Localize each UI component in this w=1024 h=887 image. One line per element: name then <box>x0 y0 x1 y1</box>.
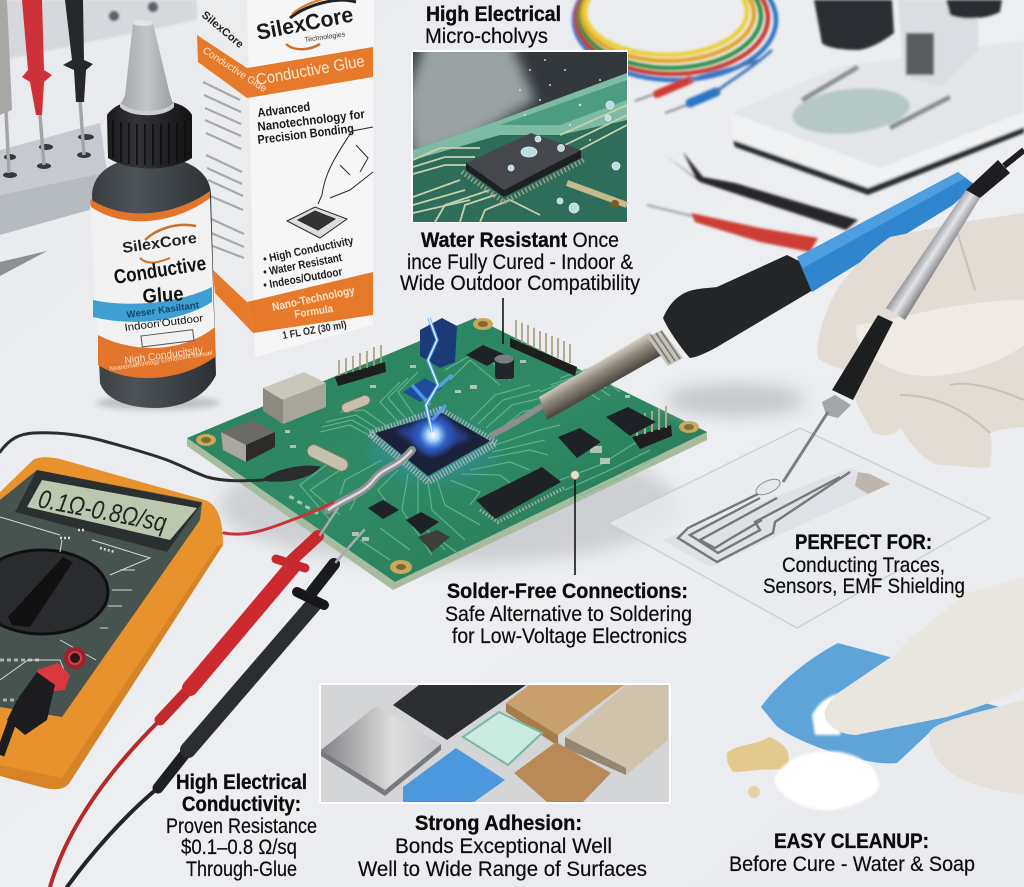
microscope, top right <box>731 0 1024 195</box>
selector dial <box>0 550 108 634</box>
label: strong adhesion: Well to Wide Range of Surfaces <box>358 858 647 881</box>
conductive silver trace <box>678 472 850 562</box>
samples: brushed metal <box>321 706 441 790</box>
label: water resistant: Water Resistant Once <box>421 229 619 252</box>
label: solder-free connections: Safe Alternative to Soldering <box>445 603 692 626</box>
panel: strong adhesion material samples <box>319 683 671 804</box>
label: high electrical micro-cholvys: High Electrical <box>426 3 561 26</box>
soldering iron <box>490 172 975 436</box>
glue bottle: Nigh Conducitsity <box>124 344 204 367</box>
input jack <box>37 647 86 692</box>
blue capacitor component <box>420 318 457 368</box>
cleanup: gloved fingers <box>825 577 1024 795</box>
samples: clear glass <box>463 712 542 765</box>
label: solder-free connections: for Low-Voltage Electronics <box>452 625 687 648</box>
cleanup: blue sponge cloth <box>761 643 1011 763</box>
box logo: SilexCore <box>254 2 355 45</box>
bottle nozzle <box>120 20 174 115</box>
label: easy cleanup <box>729 830 975 876</box>
box bullet list <box>262 235 355 292</box>
glue droplet <box>754 476 782 498</box>
cleanup: glue spill <box>727 737 789 798</box>
glue bottle: Conductive <box>112 253 208 289</box>
main microprocessor <box>370 410 496 482</box>
box side text lines <box>203 82 244 258</box>
gloved hand holding applicator pen <box>783 150 1024 482</box>
glue bottle: Neanomatroretogy Enrhorcent formuel <box>109 350 214 373</box>
label: solder-free connections: Solder-Free Connections: <box>447 580 688 603</box>
box headline <box>257 100 366 147</box>
label: perfect for: Sensors, EMF Shielding <box>763 575 965 598</box>
box headline: Precision Bonding <box>257 121 355 147</box>
label: water resistant: Wide Outdoor Compatibility <box>400 272 640 295</box>
product box: SilexCore Conductive Glue: 1 FL OZ (30 ml) <box>281 319 348 342</box>
glue bottle: Indoori'Outdoor <box>124 312 204 334</box>
LCD reading: 0.1Ω-0.8Ω/sq <box>36 483 170 538</box>
label: solder-free connections <box>445 580 692 648</box>
chips on pcb <box>368 345 656 552</box>
dark inductor block <box>221 420 275 462</box>
product box: SilexCore Conductive Glue: Formula <box>294 303 335 321</box>
pegboard with test probes, top left <box>0 0 197 276</box>
bottle logo and labels: SilexCore <box>121 230 198 257</box>
label: easy cleanup: EASY CLEANUP: <box>774 830 929 853</box>
product box: SilexCore Conductive Glue: Conductive Glue <box>200 45 269 95</box>
label: strong adhesion: Strong Adhesion: <box>415 812 582 835</box>
samples: textured beige <box>565 685 668 775</box>
silver conductive glue line <box>328 450 412 510</box>
applicator pen <box>886 190 980 320</box>
product box: SilexCore Conductive Glue: Conductive Glue <box>255 53 366 89</box>
mounting holes <box>196 318 699 574</box>
label: easy cleanup: Before Cure - Water & Soap <box>729 853 975 876</box>
label: perfect for: Conducting Traces, <box>782 554 945 577</box>
glass substrate with printed trace <box>608 428 990 628</box>
circuit board <box>187 318 707 590</box>
label: high electrical conductivity: Proven Resistance <box>166 815 317 838</box>
label: high electrical conductivity: $0.1–0.8 Ω/sq <box>181 836 297 859</box>
label: high electrical micro-cholvys: Micro-cholvys <box>425 25 548 48</box>
box illustration: hand applying glue on chip <box>287 127 373 238</box>
pcb traces <box>300 350 660 560</box>
label: high electrical micro-cholvys <box>425 3 561 48</box>
product box: SilexCore Conductive Glue <box>197 0 374 357</box>
label: water resistant: ince Fully Cured - Indoor & <box>407 251 633 274</box>
dial scale labels <box>0 517 150 700</box>
box logo: Technologies <box>304 31 346 44</box>
box headline: Nanotechnology for <box>257 107 366 134</box>
black test probe <box>67 530 364 887</box>
water chip <box>466 133 581 190</box>
plugged-in black lead <box>0 672 55 755</box>
product box: SilexCore Conductive Glue: Nano-Technology <box>271 285 356 314</box>
samples: oak <box>514 742 611 802</box>
capacitor <box>494 354 514 379</box>
box headline: Advanced <box>257 100 311 120</box>
box bullet list: • High Conductivity <box>262 235 355 266</box>
box bullet list: • Water Resistant <box>262 252 343 279</box>
samples: black acrylic <box>393 685 526 740</box>
red test probe <box>50 508 338 887</box>
glue bottle: Glue <box>142 283 184 308</box>
crystals <box>305 394 372 473</box>
cleanup: soap foam <box>774 694 879 810</box>
glue bottle: Weser Kasiltant <box>126 300 201 321</box>
multimeter <box>0 457 223 789</box>
pcb component specks <box>285 360 651 549</box>
callout leader: solder-free dot <box>570 470 580 480</box>
dip ic pins <box>480 488 564 522</box>
pin headers <box>335 320 672 449</box>
tweezers and red tool behind the iron <box>647 152 858 252</box>
multimeter cables from board <box>0 433 333 534</box>
bottle cap <box>107 100 192 168</box>
lightning spark <box>409 318 457 459</box>
callout leader lines <box>503 298 575 575</box>
shielding can <box>263 372 326 424</box>
label: perfect for <box>763 531 965 598</box>
label: perfect for: PERFECT FOR: <box>795 531 932 554</box>
label: high electrical conductivity: Conductivity: <box>182 793 301 816</box>
water traces <box>413 105 627 222</box>
label: high electrical conductivity: High Electrical <box>176 771 307 794</box>
box bullet list: • Indeos/Outdoor <box>262 266 344 292</box>
product box: SilexCore Conductive Glue: SilexCore <box>199 9 246 51</box>
water droplets <box>508 101 620 213</box>
label: strong adhesion <box>358 812 647 881</box>
label: water resistant <box>400 229 640 295</box>
label: high electrical conductivity: Through-Glue <box>186 858 297 881</box>
glue bottle <box>90 20 220 410</box>
panel: water resistant chip photo <box>405 40 628 223</box>
multimeter LCD <box>27 480 197 540</box>
samples: blue acrylic <box>403 748 505 802</box>
samples: wood <box>506 685 624 735</box>
rainbow coiled wires, top centre <box>574 0 776 113</box>
label: high electrical conductivity <box>166 771 317 881</box>
label: strong adhesion: Bonds Exceptional Well <box>395 835 612 858</box>
